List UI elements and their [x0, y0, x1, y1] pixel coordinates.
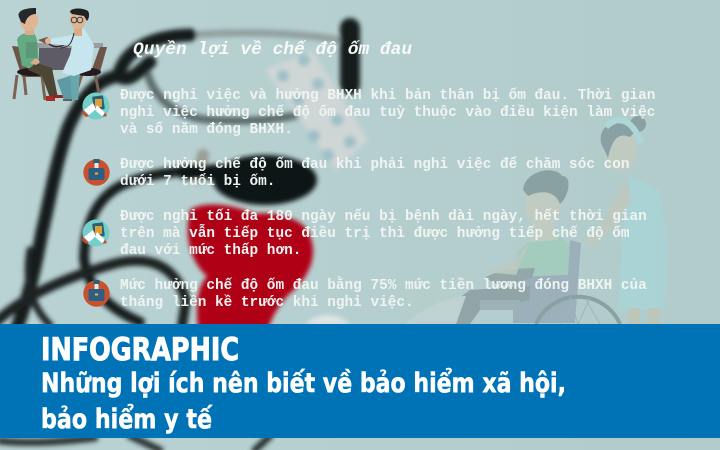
- icon: briefcase 2: [83, 280, 110, 307]
- icon: briefcase 1: [83, 159, 110, 186]
- icon: hands holding phone 2: [82, 220, 110, 246]
- illustration: doctor examining a patient: [12, 8, 107, 101]
- text block: benefit 3: Được nghỉ tối đa 180 ngày nếu bị bệnh dài ngày, hết thời gian trên mà vẫn tiếp tục điều trị thì được hưởng tiếp chế độ ốm đau với mức thấp hơn.: [120, 209, 647, 259]
- icon: hands holding phone 1: [82, 92, 110, 120]
- text block: benefit 2: Được hưởng chế độ ốm đau khi phải nghỉ việc để chăm sóc con dưới 7 tuổi bị ốm.: [120, 157, 630, 190]
- banner: headline: [0, 324, 720, 438]
- banner: headline: Những lợi ích nên biết về bảo hiểm xã hội,: [41, 366, 566, 399]
- banner: headline: INFOGRAPHIC: [41, 332, 239, 368]
- text block: benefit 4: Mức hưởng chế độ ốm đau bằng 75% mức tiền lương đóng BHXH của tháng liền kề trước khi nghỉ việc.: [120, 278, 647, 311]
- title: Quyền lợi về chế độ ốm đau: [133, 40, 412, 60]
- banner: headline: bảo hiểm y tế: [41, 402, 213, 435]
- text block: benefit 1: Được nghỉ việc và hưởng BHXH khi bản thân bị ốm đau. Thời gian nghỉ việc hưởng chế độ ốm đau tuỳ thuộc vào điều kiện làm việc và số năm đóng BHXH.: [120, 88, 655, 138]
